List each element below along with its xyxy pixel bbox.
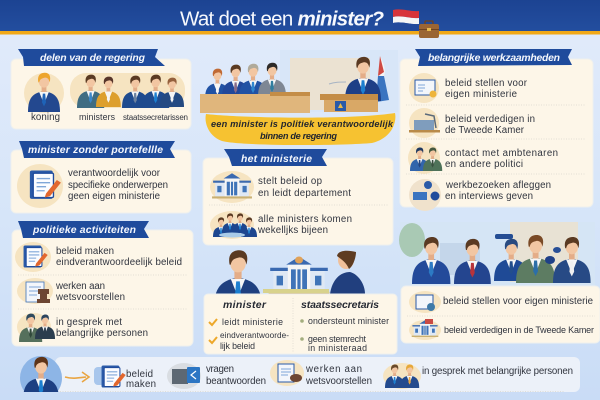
text: zonder portefeuille: geen eigen ministerie — [68, 191, 160, 202]
row: werken aan wetsvoorstellen: wetsvoorstellen — [55, 292, 125, 303]
panel: delen van de regering — [11, 49, 191, 129]
row: in gesprek met belangrijke personen: belangrijke personen — [56, 328, 148, 339]
panel: het ministerie — [203, 149, 393, 245]
row: in gesprek met belangrijke personen — [17, 313, 148, 342]
row: alle ministers komen — [210, 211, 352, 239]
icon: Dutch flag — [393, 9, 419, 31]
panel: belangrijke werkzaamheden — [400, 49, 593, 211]
icon: document and pen — [17, 164, 63, 208]
row: contact met ambtenaren: en andere politici — [445, 159, 523, 170]
row: alle ministers komen: wekelljks bijeen — [257, 225, 328, 236]
label: koning: koning — [31, 112, 60, 123]
label: staatssecretarissen: staatssecretarissen — [123, 113, 188, 122]
row: werkbezoeken: werkbezoeken afleggen — [445, 180, 551, 191]
row: contact met ambtenaren: contact met ambtenaren — [445, 148, 558, 159]
callout: politiek verantwoordelijk: binnen de regering — [260, 131, 337, 141]
ribbon: minister zonder portefeuille: minister zonder portefellle — [28, 145, 163, 156]
item: eindverantwoordelijk beleid: lijk beleid — [220, 341, 255, 351]
row: beleid stellen — [409, 73, 528, 103]
ribbon: delen van de regering — [18, 49, 165, 66]
row: werkbezoeken: en interviews geven — [445, 191, 533, 202]
item: in gesprek met belangrijke personen: in gesprek met belangrijke personen — [422, 366, 573, 377]
ribbon: belangrijke werkzaamheden: belangrijke werkzaamheden — [428, 53, 560, 64]
icon: flag — [380, 56, 388, 100]
row: beleid stellen: beleid stellen voor — [445, 78, 528, 89]
row: beleid verdedigen: beleid verdedigen in — [445, 114, 535, 125]
header banner — [0, 0, 600, 34]
item: vragen beantwoorden — [167, 363, 266, 389]
strip: bottom summary — [20, 356, 580, 392]
item: vragen beantwoorden: beantwoorden — [206, 376, 266, 387]
illustration: minister at the lectern — [200, 50, 398, 113]
row: beleid maken: beleid maken — [56, 246, 114, 257]
ribbon: minister zonder portefeuille — [19, 141, 175, 158]
item: werken aan wetsvoorstellen: werken aan — [305, 364, 362, 375]
item: vragen beantwoorden: vragen — [206, 364, 234, 375]
item: geen stemrecht: in ministeraad — [308, 343, 367, 353]
text: zonder portefeuille: verantwoordelijk voor — [68, 168, 161, 179]
item: beleid maken: beleid — [126, 369, 153, 380]
illustration: work visits and interviews — [399, 222, 595, 290]
item: werken aan wetsvoorstellen — [270, 360, 372, 387]
icon: koning — [24, 73, 64, 113]
row: beleid verdedigen: de Tweede Kamer — [445, 125, 525, 136]
row: beleid verdedigen — [409, 108, 535, 138]
title: Wat doet een minister? — [180, 8, 384, 30]
label: ministers: ministers — [79, 112, 116, 122]
heading: staatssecretaris: staatssecretaris — [301, 299, 379, 311]
item: eindverantwoordelijk beleid — [209, 331, 289, 351]
row: werken aan wetsvoorstellen — [17, 278, 125, 304]
row: beleid maken — [15, 242, 182, 272]
item: leidt ministerie: leidt ministerie — [222, 317, 283, 327]
item: beleid maken — [94, 366, 156, 390]
row: beleid stellen voor eigen ministerie — [409, 291, 593, 313]
row: beleid stellen voor eigen ministerie: beleid stellen voor eigen ministerie — [443, 296, 593, 307]
row: beleid maken: eindverantwoordeelijk beleid — [56, 257, 182, 268]
row: stelt beleid op: stelt beleid op — [258, 176, 322, 187]
icon: briefcase — [419, 21, 439, 38]
row: beleid verdedigen in de Tweede Kamer: beleid verdedigen in de Tweede Kamer — [444, 325, 594, 335]
row: contact met ambtenaren — [408, 142, 558, 174]
text: zonder portefeuille — [68, 168, 168, 202]
row: stelt beleid op — [210, 171, 351, 203]
panel: politieke activiteiten — [12, 221, 193, 346]
panel: beleid stellen and verdedigen — [401, 286, 600, 343]
row: werkbezoeken — [409, 179, 551, 211]
row: in gesprek met belangrijke personen: in gesprek met — [56, 317, 122, 328]
ribbon: delen van de regering: delen van de regering — [40, 53, 146, 64]
icon: minister portrait — [20, 356, 62, 392]
callout: politiek verantwoordelijk: een minister is politiek verantwoordelijk — [211, 119, 394, 129]
arrow — [65, 372, 89, 382]
item: werken aan wetsvoorstellen: wetsvoorstellen — [305, 376, 372, 387]
text: zonder portefeuille: specifieke onderwerpen — [68, 180, 168, 191]
ribbon: het ministerie — [224, 149, 327, 166]
ribbon: belangrijke werkzaamheden — [415, 49, 572, 66]
ribbon: politieke activiteiten — [18, 221, 149, 238]
ribbon: het ministerie: het ministerie — [241, 154, 312, 165]
table: minister vs staatssecretaris — [204, 294, 397, 354]
item: in gesprek met belangrijke personen — [383, 363, 573, 389]
item: geen stemrecht: geen stemrecht — [308, 334, 367, 344]
row: beleid stellen: eigen ministerie — [445, 89, 517, 100]
item: beleid maken: maken — [126, 379, 156, 390]
heading: minister: minister — [223, 299, 267, 311]
row: werken aan wetsvoorstellen: werken aan — [55, 281, 105, 292]
illustration: minister, ministry building and state secretary — [214, 250, 365, 309]
item: eindverantwoordelijk beleid: eindverantwoorde- — [220, 331, 289, 340]
row: beleid verdedigen in de Tweede Kamer — [409, 319, 594, 340]
panel: minister zonder portefeuille — [11, 141, 191, 213]
row: alle ministers komen: alle ministers komen — [258, 214, 352, 225]
callout: politiek verantwoordelijk — [206, 113, 395, 145]
item: ondersteunt minister: ondersteunt minister — [308, 316, 389, 326]
item: geen stemrecht — [300, 334, 367, 353]
ribbon: politieke activiteiten: politieke activiteiten — [32, 225, 136, 236]
icon: ministers and staatssecretarissen group — [70, 73, 185, 108]
row: stelt beleid op: en leidt departement — [258, 188, 351, 199]
